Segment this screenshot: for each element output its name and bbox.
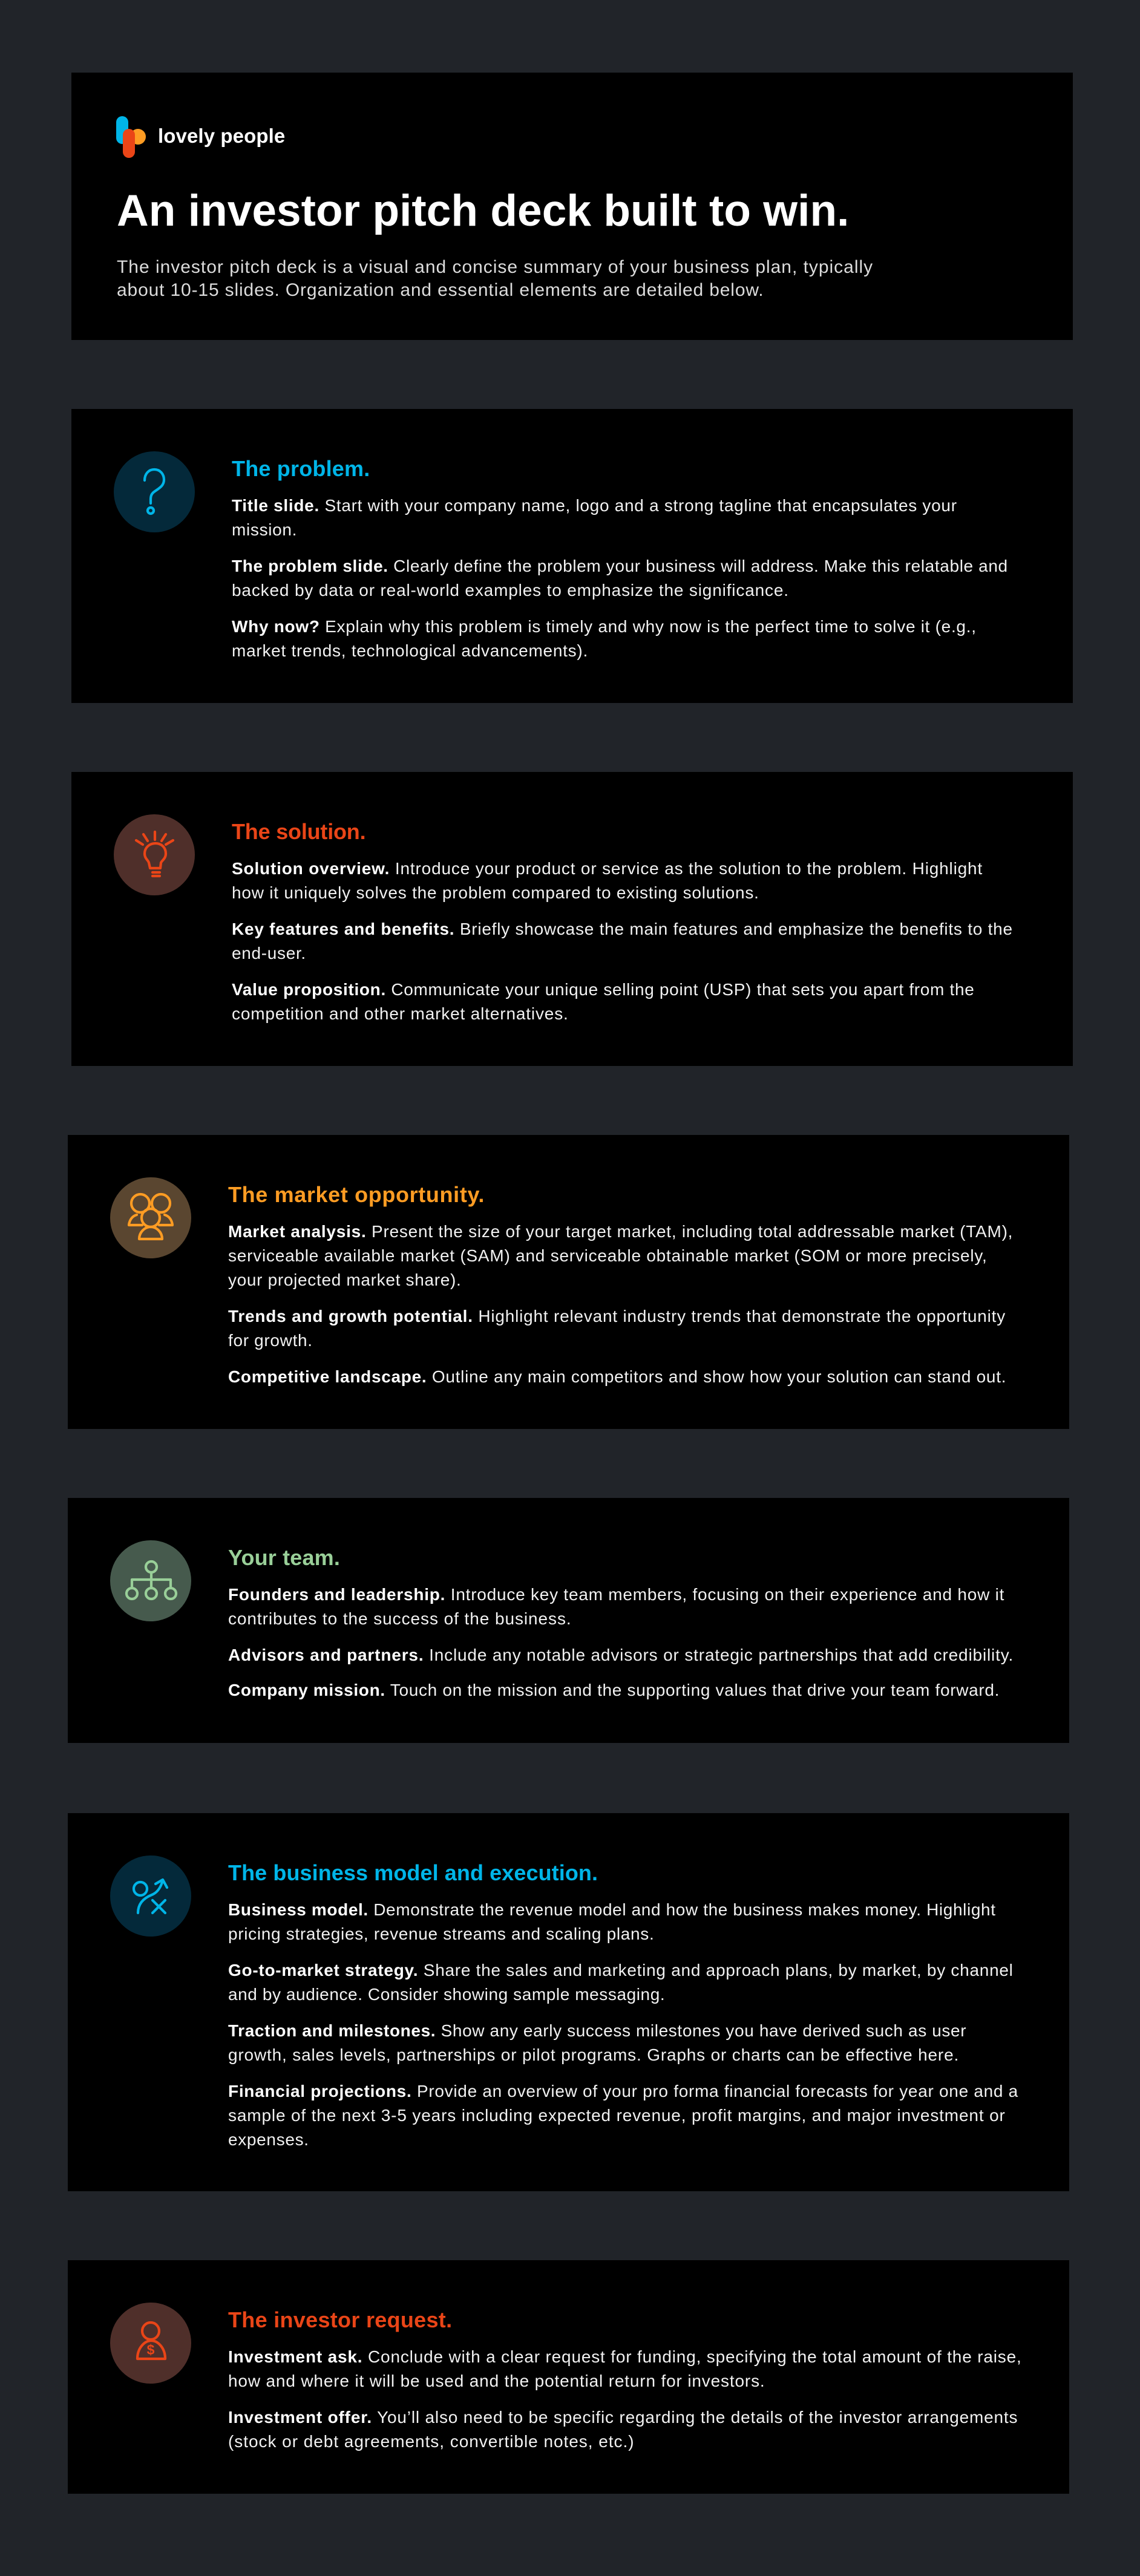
icon: strategy play — [110, 1855, 191, 1937]
text: founders: Founders and leadership. Introduce key team members, focusing on their experience and how it — [228, 1585, 1004, 1604]
intro text: The investor pitch deck is a visual and concise summary of your business plan, typically — [117, 257, 873, 277]
text: trends and growth — [228, 1307, 1006, 1350]
text: advisors: Advisors and partners. Include any notable advisors or strategic partnerships that add credibility. — [228, 1646, 1014, 1664]
text: founders: contributes to the success of the business. — [228, 1609, 572, 1628]
text: go-to-market — [228, 1961, 1014, 2004]
text: investment offer — [228, 2408, 1018, 2451]
heading: The investor request. — [228, 2307, 452, 2332]
icon: light bulb — [114, 814, 195, 895]
text: key features: end-user. — [232, 944, 306, 963]
text: value proposition — [232, 980, 974, 1023]
heading: The problem. — [232, 456, 370, 481]
text: financial projections: Financial projections. Provide an overview of your pro forma financial forecasts for year one and a — [228, 2082, 1018, 2100]
heading: The market opportunity. — [228, 1182, 485, 1207]
text: traction: Traction and milestones. Show any early success milestones you have derived such as user — [228, 2021, 966, 2040]
text: go-to-market: Go-to-market strategy. Share the sales and marketing and approach plans, by market, by channel — [228, 1961, 1014, 1979]
text: solution overview — [232, 859, 983, 902]
text: business model: Business model. Demonstrate the revenue model and how the business makes money. Highlight — [228, 1900, 996, 1919]
text: market analysis — [228, 1222, 1013, 1289]
logo wordmark: lovely people — [158, 125, 285, 147]
text: business model: pricing strategies, revenue streams and scaling plans. — [228, 1924, 654, 1943]
icon: group of people — [110, 1177, 191, 1258]
text: business model — [228, 1900, 996, 1943]
text: founders — [228, 1585, 1004, 1628]
text: problem slide — [232, 557, 1008, 600]
text: financial projections — [228, 2082, 1018, 2149]
text: financial projections: expenses. — [228, 2130, 309, 2149]
panel: header — [71, 73, 1073, 340]
panel: the business model and execution — [68, 1813, 1069, 2191]
text: why now: market trends, technological advancements). — [232, 641, 588, 660]
panel: the solution — [71, 772, 1073, 1066]
text: key features — [232, 920, 1013, 963]
text: problem slide: backed by data or real-world examples to emphasize the significance. — [232, 581, 789, 600]
text: problem slide: The problem slide. Clearly define the problem your business will address. Make this relatable and — [232, 557, 1008, 575]
text: title slide: mission. — [232, 520, 297, 539]
text: why now — [232, 617, 977, 660]
text: competitive landscape: Competitive landscape. Outline any main competitors and show how your solution can stand out. — [228, 1367, 1006, 1386]
text: title slide: Title slide. Start with your company name, logo and a strong tagline that encapsulates your — [232, 496, 957, 515]
text: investment ask: how and where it will be used and the potential return for investors. — [228, 2372, 765, 2390]
text: company mission: Company mission. Touch on the mission and the supporting values that drive your team forward. — [228, 1681, 1000, 1699]
heading: The solution. — [232, 819, 365, 844]
text: market analysis: Market analysis. Present the size of your target market, including total addressable market (TAM), — [228, 1222, 1013, 1241]
text: go-to-market: and by audience. Consider showing sample messaging. — [228, 1985, 665, 2004]
text: investment offer: Investment offer. You’ll also need to be specific regarding the details of the investor arrangements — [228, 2408, 1018, 2427]
intro text: about 10-15 slides. Organization and essential elements are detailed below. — [117, 280, 764, 300]
text: value proposition: competition and other market alternatives. — [232, 1004, 569, 1023]
text: market analysis: serviceable available market (SAM) and serviceable obtainable market (SOM or more precisely, — [228, 1246, 988, 1265]
intro text — [117, 257, 873, 300]
text: key features: Key features and benefits. Briefly showcase the main features and emphasize the benefits to the — [232, 920, 1013, 938]
icon: investor with dollar: $ — [147, 2342, 155, 2358]
icon: lovely people logo — [116, 116, 146, 158]
panel: the market opportunity — [68, 1135, 1069, 1429]
heading: The business model and execution. — [228, 1860, 598, 1885]
icon: org chart — [110, 1540, 191, 1621]
text: value proposition: Value proposition. Communicate your unique selling point (USP) that sets you apart from the — [232, 980, 974, 999]
text: trends and growth: Trends and growth potential. Highlight relevant industry trends that demonstrate the opportunity — [228, 1307, 1006, 1326]
text: financial projections: sample of the next 3-5 years including expected revenue, profit margins, and major investment or — [228, 2106, 1006, 2125]
text: solution overview: Solution overview. Introduce your product or service as the solution to the problem. Highlight — [232, 859, 983, 878]
title: An investor pitch deck built to win. — [117, 186, 849, 235]
text: investment offer: (stock or debt agreements, convertible notes, etc.) — [228, 2432, 634, 2451]
icon: investor with dollar — [110, 2303, 191, 2384]
panel: the problem — [71, 409, 1073, 703]
heading: Your team. — [228, 1545, 340, 1570]
text: trends and growth: for growth. — [228, 1331, 313, 1350]
text: solution overview: how it uniquely solves the problem compared to existing solutions. — [232, 883, 759, 902]
icon: question mark — [114, 451, 195, 532]
text: investment ask: Investment ask. Conclude with a clear request for funding, specifying the total amount of the raise, — [228, 2347, 1022, 2366]
text: title slide — [232, 496, 957, 539]
text: traction — [228, 2021, 966, 2064]
text: why now: Why now? Explain why this problem is timely and why now is the perfect time to solve it (e.g., — [232, 617, 977, 636]
text: traction: growth, sales levels, partnerships or pilot programs. Graphs or charts can be effective here. — [228, 2045, 959, 2064]
text: investment ask — [228, 2347, 1022, 2390]
panel: your team — [68, 1498, 1069, 1743]
text: market analysis: your projected market share). — [228, 1270, 461, 1289]
panel: the investor request — [68, 2260, 1069, 2494]
